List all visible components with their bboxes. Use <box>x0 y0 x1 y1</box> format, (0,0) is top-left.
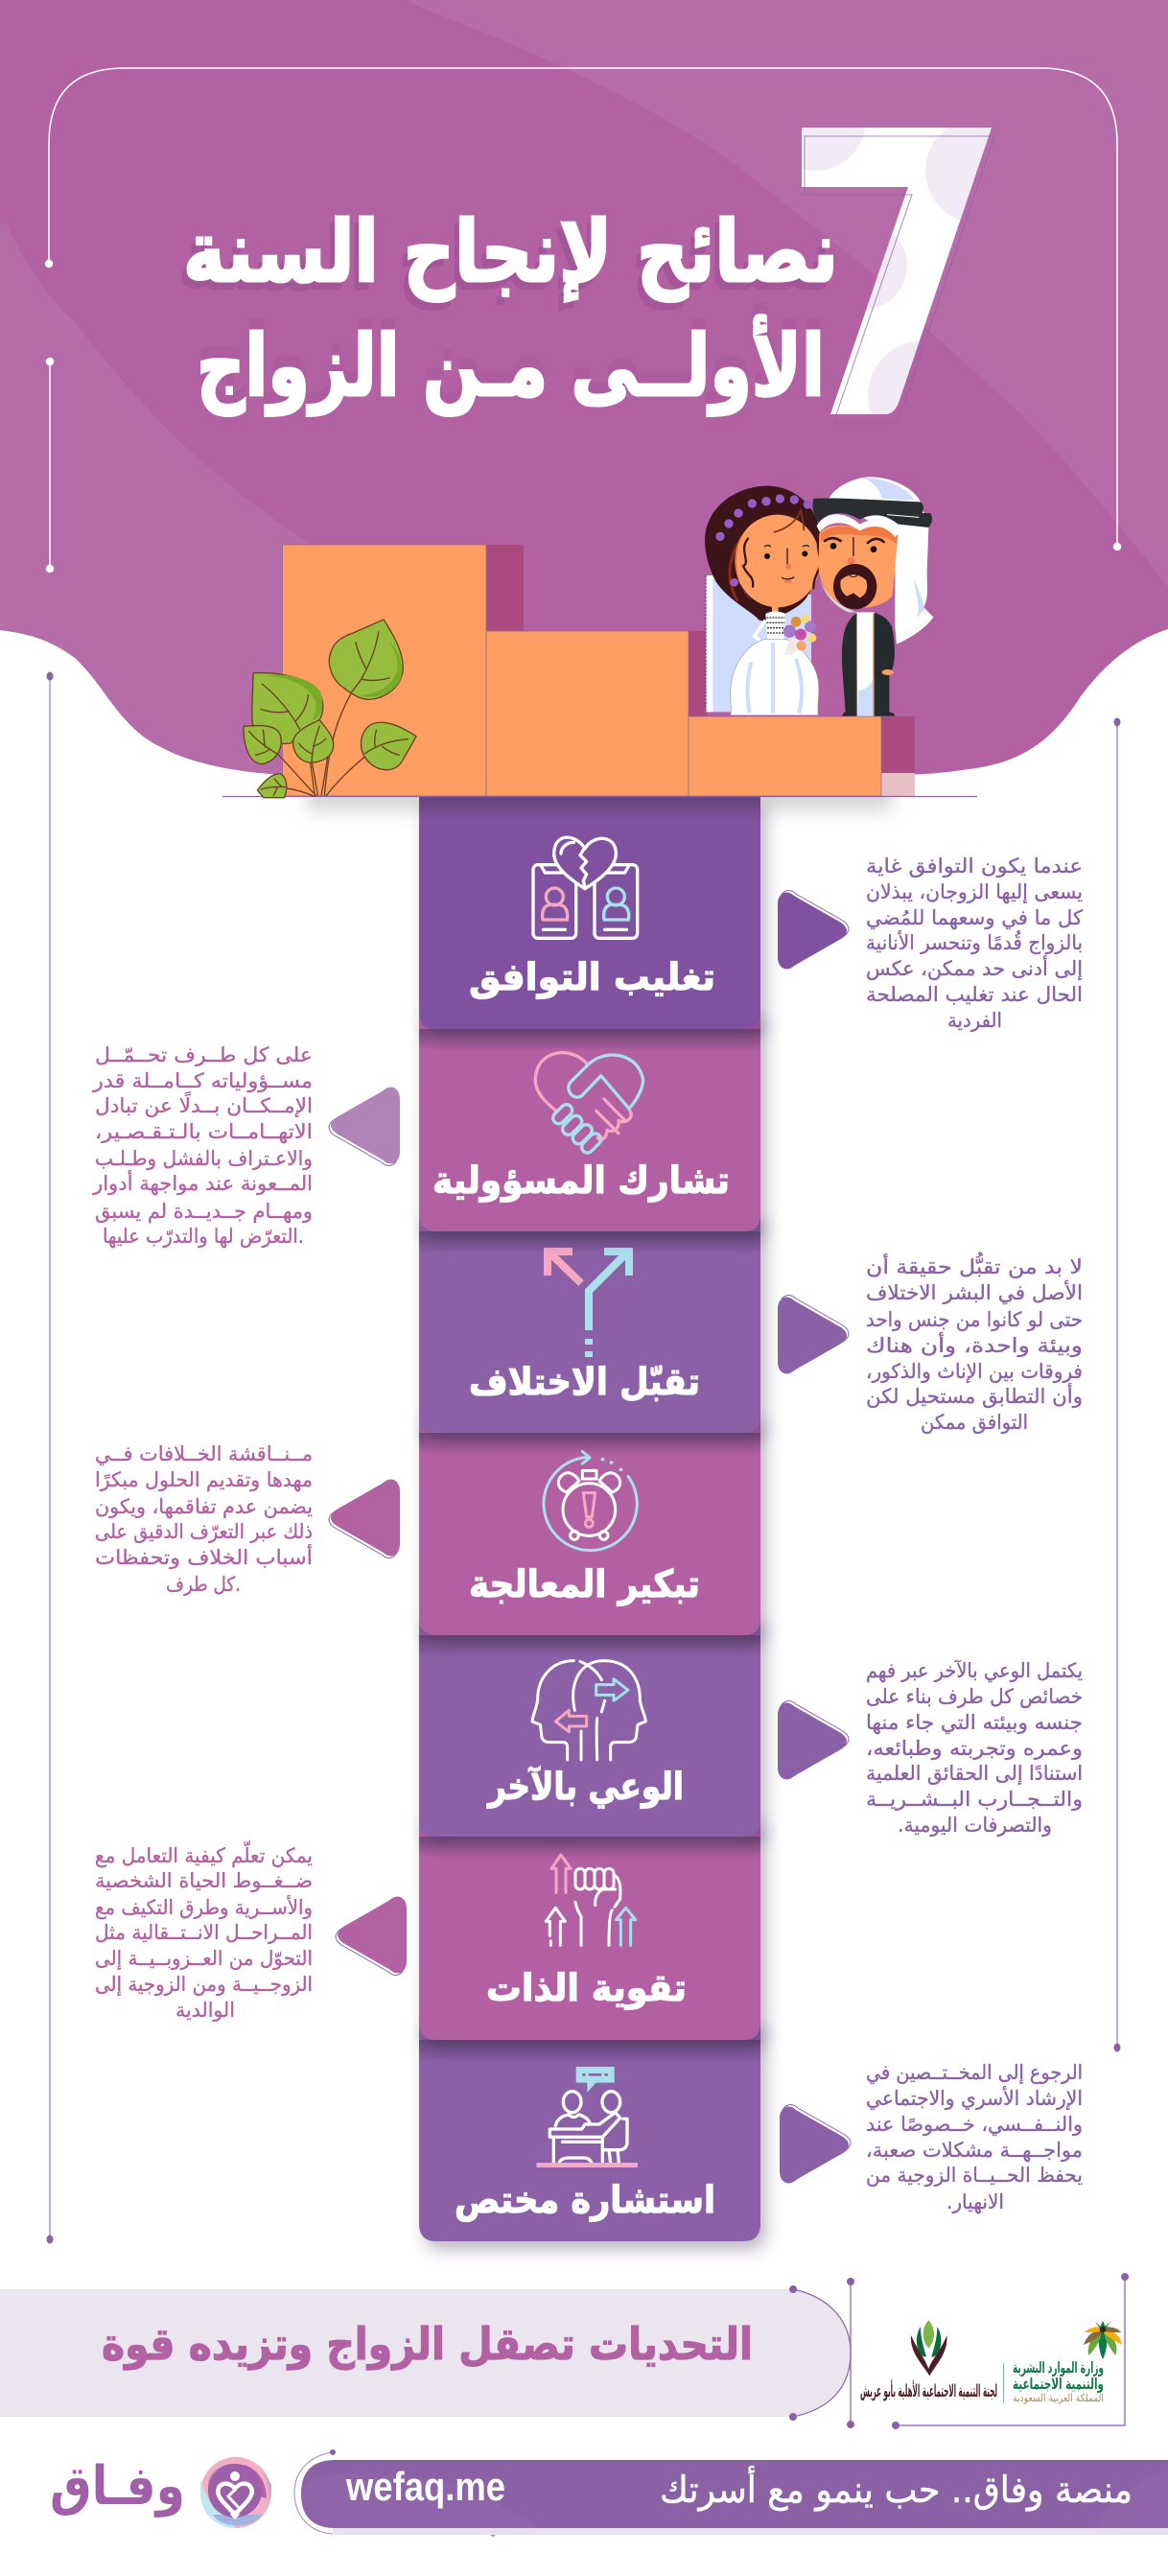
text: tip 5 <box>866 1659 1083 1837</box>
text: tip 6: والأســرية وطرق التكيف مع <box>95 1895 313 1919</box>
text: tip 5: استنادًا إلى الحقائق العلمية <box>866 1762 1083 1786</box>
card 6 <box>419 1817 760 2040</box>
card 2 <box>419 1010 760 1231</box>
text: tip 6: يمكن تعلّم كيفية التعامل مع <box>95 1839 313 1868</box>
text: tip 6: الزوجــيــة ومن الزوجية إلى <box>95 1973 313 1997</box>
text: tip 7: مواجــهــة مشكلات صعبة،‏ <box>866 2139 1083 2162</box>
text: tip 5: جنسه وبيئته التي جاء منها <box>866 1711 1083 1734</box>
text: tip 1: يسعى إليها الزوجان، يبذلان <box>866 880 1083 904</box>
text: tip 6: الوالدية <box>175 1999 235 2022</box>
arrow: tip 3 <box>778 1296 849 1373</box>
text: tip 3: وأن التطابق مستحيل لكن <box>866 1383 1083 1408</box>
soft shadow under ground line <box>307 782 892 810</box>
title: نصائح لإنجاح السنة <box>183 202 838 302</box>
vertical side lines <box>46 671 1120 2244</box>
text: tip 7: والنــفــسي، خــصوصًا عند <box>866 2113 1083 2136</box>
text: tip 4: مهدها وتقديم الحلول مبكرًا <box>95 1468 313 1492</box>
heading: card 1: تغليب التوافق <box>469 956 715 999</box>
text: tip 1: عندما يكون التوافق غاية <box>866 855 1083 878</box>
text: tip 2: المــعونة عند مواجهة أدوار <box>92 1170 313 1195</box>
arrow: tip 1 <box>778 891 849 969</box>
text: tip 5: والتــجــارب البــشــريــة <box>866 1788 1083 1811</box>
heading: card 4: تبكير المعالجة <box>469 1563 700 1606</box>
text: tip 4: مــنــاقشة الخــلافات فــي <box>95 1442 313 1465</box>
text: tip 7 <box>866 2061 1083 2213</box>
text: tip 5: يكتمل الوعي بالآخر عبر فهم <box>866 1659 1083 1683</box>
text: tip 7: يحفظ الحــيــاة الزوجية من <box>866 2164 1083 2187</box>
ground line <box>222 796 977 798</box>
footer band <box>294 2449 1168 2537</box>
text: tip 1: كل ما في وسعهما للمُضي <box>866 906 1083 929</box>
text: tip 1: بالزواج قُدمًا وتنحسر الأنانية <box>866 929 1083 955</box>
title: الأولــى مـن الزواج <box>197 303 825 405</box>
header rounded frame lines <box>46 68 1120 572</box>
text: tip 2: الاتهــامــات بالـتـقـصـير،‏ <box>95 1120 313 1143</box>
heading: card 3: تقبّل الاختلاف <box>469 1361 700 1404</box>
heading: card 2: تشارك المسؤولية <box>432 1159 730 1203</box>
logo: ministry: المملكة العربية السعودية <box>1013 2392 1104 2404</box>
text: tip 6 <box>95 1839 313 2022</box>
illustration: groom <box>812 477 933 716</box>
text: tip 2 <box>92 1043 313 1248</box>
card 1 <box>419 797 760 1029</box>
text: tip 2: على كل طــرف تحــمّــل <box>95 1043 313 1066</box>
stepped boxes <box>282 545 915 796</box>
logo: committee <box>860 2320 997 2401</box>
text: tip 3 <box>866 1252 1083 1434</box>
text: tip 6: المــراحــل الانــتــقالية مثل <box>95 1921 313 1944</box>
arrow: tip 7 <box>780 2105 851 2183</box>
illustration: bride <box>705 486 822 715</box>
text: tip 7: الإرشاد الأسري والاجتماعي <box>866 2086 1083 2110</box>
text: tip 4: يضمن عدم تفاقمها، ويكون <box>95 1495 313 1518</box>
text: tip 1 <box>866 855 1083 1032</box>
logo frame <box>847 2273 1129 2429</box>
text: tip 2: ومهــام جــديــدة لم يسبق <box>95 1200 313 1224</box>
banner text: التحديات تصقل الزواج وتزيده قوة <box>102 2318 753 2370</box>
slogan: منصة وفاق.. حب ينمو مع أسرتك <box>660 2466 1133 2512</box>
text: tip 3: الأصل في البشر الاختلاف <box>866 1280 1083 1304</box>
title: نصائح لإنجاح السنة <box>178 210 833 310</box>
text: tip 4: أسباب الخلاف وتحفظات <box>95 1544 313 1569</box>
text: tip 5: والتصرفات اليومية.‏ <box>898 1814 1052 1837</box>
text: tip 2: الإمــكــان بــدلًا عن تبادل <box>95 1090 313 1117</box>
closing banner <box>0 2285 851 2421</box>
text: tip 6: التحوّل من العــزوبــيــة إلى <box>95 1947 313 1971</box>
title <box>178 202 838 416</box>
icon: consultation <box>536 2067 638 2167</box>
text: tip 2: التعرّض لها والتدرّب عليها. <box>103 1225 304 1248</box>
card 4 <box>419 1414 760 1635</box>
logo: wefaq wordmark: وفـاق <box>50 2455 185 2517</box>
card 5 <box>419 1616 760 1837</box>
text: tip 5: خصائص كل طرف بناء على <box>866 1685 1083 1708</box>
title: الأولــى مـن الزواج <box>197 315 825 416</box>
url: wefaq.me <box>345 2464 505 2509</box>
heading: card 5: الوعي بالآخر <box>486 1766 684 1809</box>
text: tip 3: التوافق ممكن <box>921 1411 1028 1434</box>
icon: alarm clock <box>544 1451 637 1551</box>
text: tip 1: إلى أدنى حد ممكن، عكس <box>866 955 1083 981</box>
icon: diverging arrows <box>548 1252 629 1357</box>
card 3 <box>419 1212 760 1433</box>
text: tip 1: الفردية <box>947 1009 1002 1032</box>
heading: card 7: استشارة مختص <box>455 2179 715 2222</box>
text: tip 4 <box>95 1442 313 1596</box>
logo: ministry <box>1003 2321 1122 2404</box>
text: tip 4: كل طرف. <box>166 1573 241 1596</box>
arrow: tip 4 <box>329 1480 400 1557</box>
text: tip 1: الحال عند تغليب المصلحة <box>866 983 1083 1006</box>
arrow: tip 5 <box>778 1701 849 1779</box>
text: tip 3: حتى لو كانوا من جنس واحد <box>866 1308 1083 1331</box>
logo: wefaq symbol <box>200 2457 271 2528</box>
text: tip 3: وبيئة واحدة، وأن هناك <box>866 1332 1083 1357</box>
text: tip 7: الانهيار.‏ <box>946 2190 1004 2213</box>
icon: fist with arrows <box>546 1855 636 1945</box>
logo: ministry: والتنمية الاجتماعية <box>1013 2375 1104 2393</box>
text: tip 3: لا بد من تقبُّل حقيقة أن <box>866 1252 1083 1278</box>
text: tip 2: والاعـتراف بالفشل وطـلـب <box>95 1147 313 1170</box>
big number 7 <box>802 128 995 424</box>
icon: handshake heart <box>535 1053 643 1155</box>
arrow: tip 2 <box>329 1088 400 1165</box>
icon: two heads <box>532 1661 645 1760</box>
heading: card 6: تقوية الذات <box>486 1967 687 2010</box>
arrow: tip 6 <box>336 1897 407 1975</box>
text: tip 5: وعمره وتجربته وطبائعه،‏ <box>866 1737 1083 1760</box>
icon: phones with broken heart <box>533 837 638 938</box>
text: tip 2: مســؤولياته كــامــلة قدر <box>92 1069 313 1092</box>
text: tip 4: ذلك عبر التعرّف الدقيق على <box>95 1520 313 1543</box>
illustration: plant <box>244 620 416 798</box>
text: tip 6: ضــغــوط الحياة الشخصية <box>95 1869 313 1892</box>
text: tip 3: فروقات بين الإناث والذكور،‏ <box>866 1360 1083 1383</box>
text: tip 7: الرجوع إلى المخــتــصين في <box>866 2061 1083 2085</box>
header background <box>0 0 1168 796</box>
card 7 <box>419 2019 760 2241</box>
